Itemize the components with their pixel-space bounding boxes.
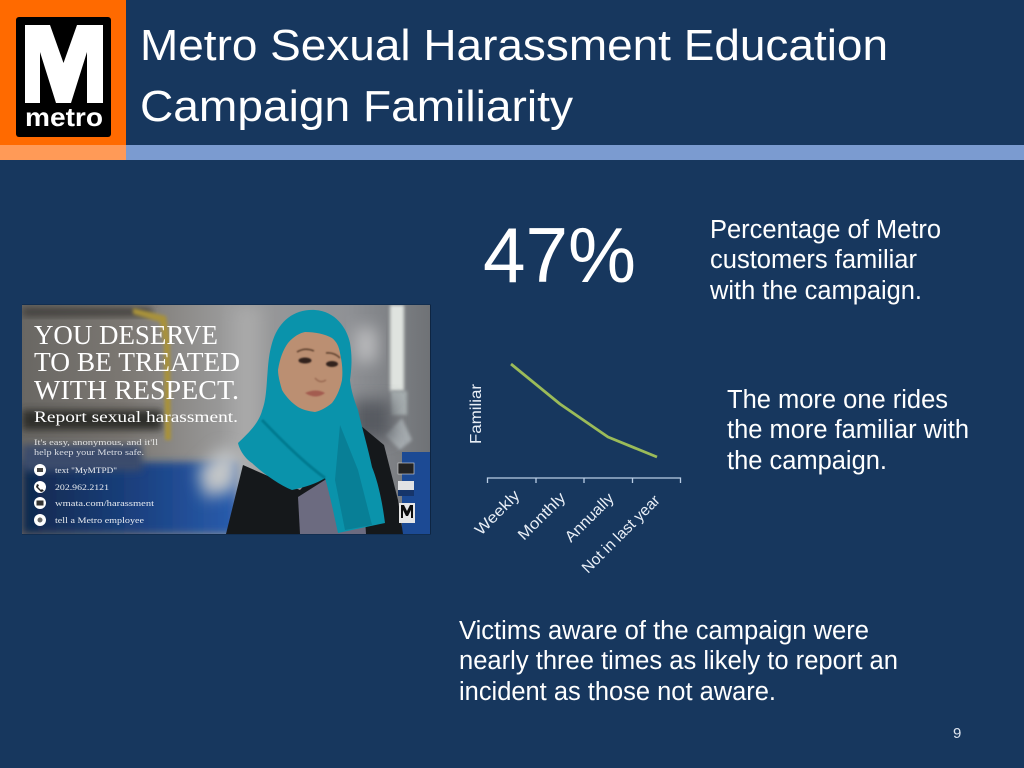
poster small logos: [398, 463, 415, 523]
text: victims finding: Victims aware of the campaign were: [459, 617, 869, 645]
x-axis category labels: [472, 487, 664, 577]
poster headline and contact text: help keep your Metro safe.: [34, 448, 144, 457]
text: ridership finding: The more one rides: [727, 386, 948, 414]
poster headline and contact text: WITH RESPECT.: [34, 375, 239, 405]
poster headline and contact text: text "MyMTPD": [55, 466, 117, 475]
title: [140, 21, 888, 131]
poster headline and contact text: It's easy, anonymous, and it'll: [34, 438, 159, 447]
header accent band: [0, 0, 1024, 160]
text: ridership finding: the more familiar with: [727, 416, 969, 444]
text: victims finding: nearly three times as likely to report an: [459, 647, 898, 675]
x-axis category labels: Not in last year: [579, 492, 664, 577]
x-axis category labels: Annually: [562, 490, 618, 546]
text: percentage familiar: [709, 216, 941, 305]
figure: woman in teal hijab: [226, 310, 403, 534]
icon: Metro logo: metro: [25, 102, 103, 132]
x-axis category labels: Monthly: [515, 489, 569, 544]
poster headline and contact text: TO BE TREATED: [34, 347, 240, 377]
x-axis category labels: Weekly: [472, 487, 524, 539]
x-axis: [488, 478, 680, 483]
text: percentage familiar: Percentage of Metro: [710, 216, 941, 244]
y-axis label: Familiar: [468, 383, 485, 444]
text: percentage familiar: with the campaign.: [709, 277, 922, 305]
poster background: [22, 305, 430, 535]
data line: [511, 364, 657, 457]
icon: Metro logo: [16, 17, 111, 137]
text: victims finding: incident as those not aware.: [459, 678, 776, 706]
poster headline and contact text: 202.962.2121: [55, 483, 109, 492]
poster headline and contact text: [34, 320, 240, 526]
poster headline and contact text: Report sexual harassment.: [34, 409, 238, 426]
text: ridership finding: the campaign.: [727, 447, 887, 475]
campaign poster photo: [22, 304, 431, 535]
poster headline and contact text: tell a Metro employee: [55, 516, 145, 525]
text: percentage familiar: customers familiar: [710, 246, 917, 274]
text: victims finding: [459, 617, 898, 706]
title: Metro Sexual Harassment Education: [140, 21, 888, 70]
big statistic: 47%: 47%: [483, 211, 636, 299]
title: Campaign Familiarity: [140, 82, 573, 131]
poster headline and contact text: wmata.com/harassment: [55, 499, 155, 508]
text: ridership finding: [727, 386, 969, 475]
poster headline and contact text: YOU DESERVE: [34, 320, 218, 350]
page number: 9: [953, 725, 961, 742]
line chart: familiarity by ridership: [468, 364, 680, 577]
